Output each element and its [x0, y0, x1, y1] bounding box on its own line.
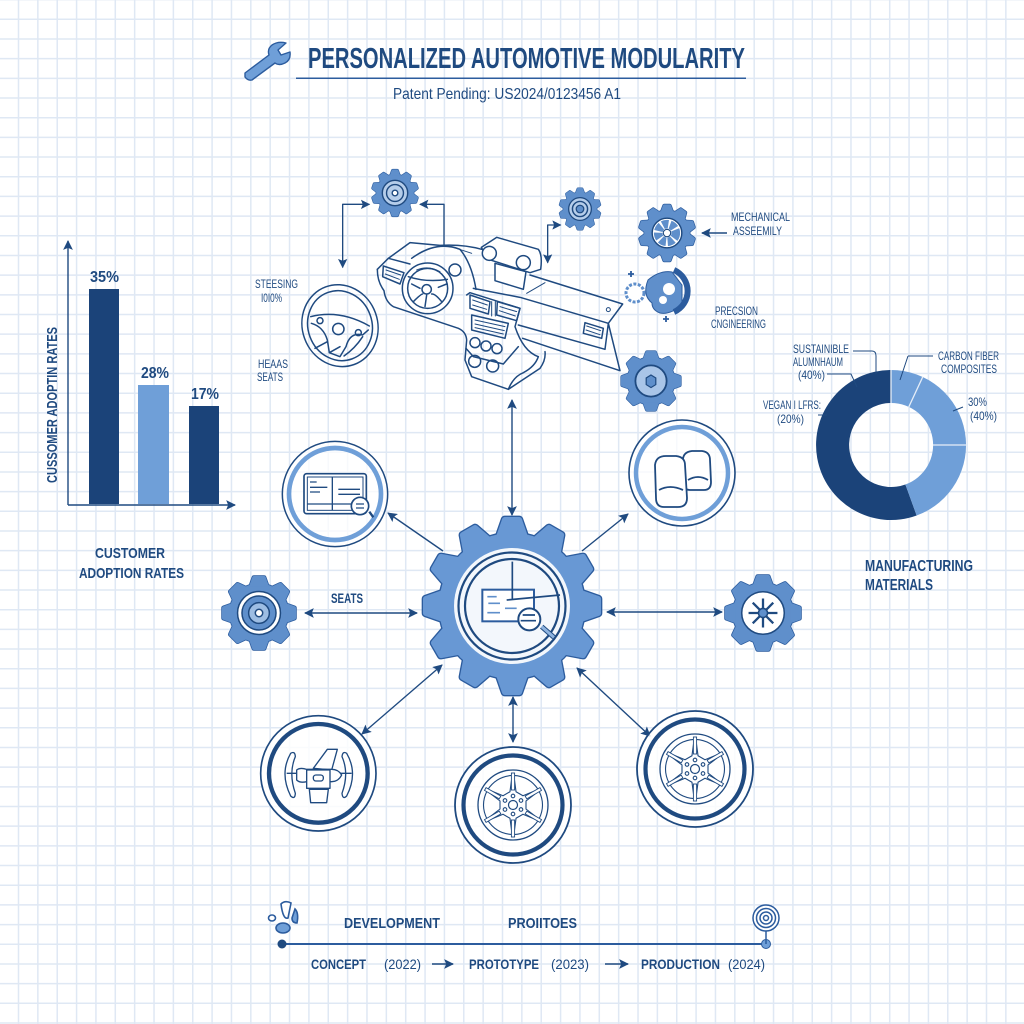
label: seats [257, 357, 288, 384]
chart axes [67, 241, 69, 505]
timeline headings [344, 915, 577, 932]
label: vegan leather: VEGAN I LFRS: [763, 398, 821, 412]
label: sustainable aluminium [793, 342, 849, 382]
label: 30% [968, 395, 997, 423]
module: screen [282, 441, 388, 547]
leader lines [818, 351, 963, 415]
title: PERSONALIZED AUTOMOTIVE MODULARITY [308, 43, 745, 75]
module: seats [629, 420, 735, 526]
timeline headings: DEVELOPMENT [344, 915, 440, 932]
y axis label: CUSSOMER ADOPTIN RATES [44, 327, 61, 483]
panel: dashboard illustration [290, 204, 623, 389]
subtitle: Patent Pending: US2024/0123456 A1 [393, 86, 621, 103]
label: steering [255, 277, 298, 305]
donut: dark segment [816, 370, 917, 520]
title rule [296, 78, 746, 79]
label: precision engineering [711, 304, 766, 331]
icon: wrench [245, 42, 290, 80]
hub icon: screen with magnifier [482, 562, 560, 637]
donut separators [891, 370, 966, 445]
label: sustainable aluminium: (40%) [798, 368, 825, 382]
label: sustainable aluminium: ALUMNHAUM [793, 355, 843, 369]
value: 35%: 35% [90, 269, 119, 286]
bar: 17% [189, 406, 219, 504]
dashboard body [377, 243, 623, 389]
donut: light segment [891, 370, 966, 516]
gear body [423, 517, 601, 695]
gear: left module [222, 576, 296, 650]
timeline end dot [762, 940, 770, 948]
module: center wheel [455, 747, 571, 863]
label: sustainable aluminium: SUSTAINIBLE [793, 342, 849, 356]
timeline icon: spiral target [753, 905, 779, 944]
bar: 28% [138, 385, 169, 504]
timeline headings: PROIITOES [508, 915, 577, 932]
label: carbon fiber composites: COMPOSITES [941, 362, 997, 376]
icon: precision mechanism [626, 270, 688, 322]
label: precision engineering: PRECSION [715, 304, 758, 318]
gear: mechanical assembly [638, 204, 696, 262]
chart title: MANUFACTURING [865, 558, 973, 575]
timeline start dot [278, 940, 286, 948]
timeline arrows [432, 963, 628, 965]
label: vegan leather [763, 398, 821, 426]
arrow: mechanical assembly [702, 232, 727, 234]
timeline stages: PROTOTYPE [469, 956, 539, 972]
timeline stages [311, 956, 765, 972]
central gear hub [423, 517, 601, 695]
module: steering column [261, 716, 376, 831]
label: steering: STEESING [255, 277, 298, 291]
timeline stages: (2024) [728, 956, 765, 972]
chart title [865, 558, 973, 594]
label: mechanical assembly [731, 210, 790, 238]
dashboard steering wheel [402, 263, 461, 314]
instrument binnacle [412, 246, 476, 289]
label: carbon fiber composites [938, 349, 999, 376]
chart title: CUSTOMER [95, 545, 165, 562]
panel: customer adoption bar chart [44, 241, 235, 582]
label: seats: HEAAS [258, 357, 288, 371]
bar: 35% [89, 289, 119, 504]
chart title [79, 545, 184, 582]
value: 28%: 28% [141, 365, 169, 382]
header [245, 42, 746, 103]
chart title: MATERIALS [865, 577, 933, 594]
timeline icon: concept parts [268, 902, 298, 933]
label: 30%: (40%) [970, 409, 997, 423]
timeline [268, 902, 779, 972]
gear: top middle [559, 188, 601, 230]
label: seats connector: SEATS [331, 590, 363, 606]
dashboard mirror and screen [481, 237, 541, 289]
timeline stages: (2022) [384, 956, 421, 972]
timeline rule [282, 943, 766, 945]
label: seats: SEATS [257, 370, 283, 384]
connector arrows [343, 204, 561, 267]
hub connector arrows [305, 400, 722, 742]
label: precision engineering: CNGINEERING [711, 317, 766, 331]
hub rings [454, 548, 570, 664]
timeline stages: CONCEPT [311, 956, 366, 972]
chart title: ADOPTION RATES [79, 565, 184, 582]
label: steering: I0I0% [261, 291, 282, 305]
vents, radio and controls [383, 266, 610, 372]
timeline stages: PRODUCTION [641, 956, 720, 972]
label: mechanical assembly: ASSEEMILY [733, 224, 782, 238]
label: mechanical assembly: MECHANICAL [731, 210, 790, 224]
gear: lower dashboard [621, 351, 681, 411]
standalone steering wheel [290, 274, 390, 377]
label: 30%: 30% [968, 395, 987, 409]
module: right wheel [637, 711, 753, 827]
gear: right module [725, 575, 801, 651]
panel: manufacturing materials donut chart [763, 342, 999, 594]
timeline stages: (2023) [551, 956, 589, 972]
value: 17%: 17% [191, 386, 219, 403]
label: vegan leather: (20%) [777, 412, 804, 426]
gear: top left [371, 170, 419, 216]
